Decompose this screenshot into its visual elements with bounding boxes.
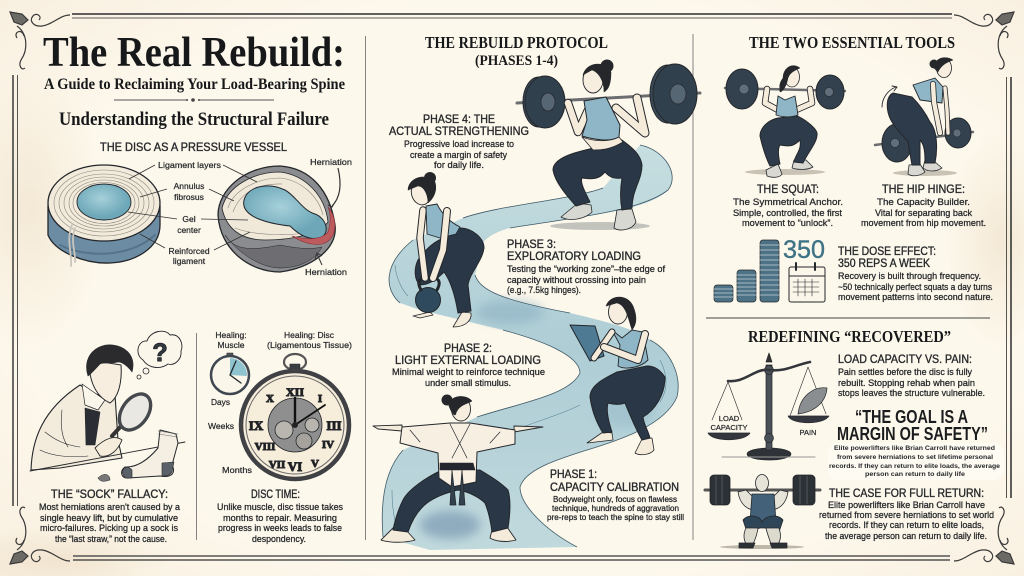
text: disc time: Unlike muscle, disc tissue takes (217, 502, 343, 513)
text: phase 1: Bodyweight only, focus on flawless (553, 494, 677, 504)
small print patch: records. If they can return to elite loads, the average (829, 463, 1000, 470)
subtitle: A Guide to Reclaiming Your Load-Bearing Spine (44, 76, 345, 93)
text: sock fallacy: single heavy lift, but by cumulative (40, 513, 178, 524)
figure: phase 2 reader squat (570, 297, 665, 455)
text: case for full return: Elite powerlifters like Brian Carroll have (828, 500, 985, 511)
ornament divider (114, 98, 274, 102)
heading: rebuild protocol (425, 33, 608, 69)
scale labels: CAPACITY (711, 423, 747, 432)
text: load capacity vs pain: Pain settles before the disc is fully (838, 367, 972, 378)
text: phase 3: Testing the “working zone”–the edge of (507, 264, 665, 275)
text: hip hinge: movement from hip movement. (861, 218, 986, 229)
pocket watch: V (311, 458, 319, 470)
text: phase 4: PHASE 4: THE (423, 112, 495, 126)
text: disc time: progress in weeks leads to false (218, 523, 342, 534)
figure: phase 3 kettlebell (408, 172, 484, 327)
text: squat: THE SQUAT: (757, 182, 819, 196)
text: squat: movement to “unlock”. (742, 218, 833, 229)
text: hip hinge (861, 182, 986, 229)
text: load capacity vs pain: LOAD CAPACITY VS. PAIN: (838, 352, 972, 366)
scale labels: LOAD (719, 414, 740, 423)
text: phase 2: PHASE 2: (444, 341, 492, 355)
small print patch (828, 443, 1004, 480)
disc labels: Ligament layers (158, 160, 221, 170)
small print patch: Elite powerlifters like Brian Carroll have returned (834, 445, 995, 452)
figure: phase 4 barbell squat (517, 60, 700, 230)
disc labels: Gel (182, 214, 196, 224)
text: dose effect: THE DOSE EFFECT: (838, 244, 936, 258)
disc labels: fibrosus (174, 192, 204, 202)
pocket watch: III (326, 418, 342, 433)
heading: rebuild protocol: THE REBUILD PROTOCOL (425, 33, 608, 52)
text: phase 2: under small stimulus. (425, 378, 511, 389)
disc labels (158, 157, 352, 277)
text: disc time (217, 487, 343, 545)
disc labels: Annulus (174, 181, 204, 191)
number: 350: 350 (783, 236, 825, 264)
heading: disc as pressure vessel: THE DISC AS A PRESSURE VESSEL (100, 140, 287, 154)
pocket watch: VII (269, 459, 285, 471)
text: disc time: months to repair. Measuring (223, 513, 337, 524)
title: The Real Rebuild: (43, 30, 345, 76)
text: sock fallacy: Most herniations aren't caused by a (39, 502, 181, 513)
leader lines and arrows (128, 165, 340, 265)
text: phase 4: for daily life. (434, 160, 484, 171)
text: phase 4: Progressive load increase to (404, 139, 514, 150)
illustration: herniated disc (218, 166, 335, 272)
clock labels: Weeks (208, 421, 234, 431)
thought bubble (137, 331, 182, 379)
text: case for full return: THE CASE FOR FULL RETURN: (829, 486, 984, 500)
text: phase 3: PHASE 3: (507, 237, 556, 251)
text: case for full return: the average person can return to daily life. (825, 531, 987, 542)
text: sock fallacy: micro-failures. Picking up a sock is (40, 523, 178, 534)
pocket watch: VIII (255, 441, 275, 453)
text: hip hinge: The Capacity Builder. (877, 197, 970, 208)
clock labels: (Ligamentous Tissue) (267, 340, 352, 350)
text: disc time: DISC TIME: (251, 487, 300, 501)
figure: powerlifter (705, 474, 820, 549)
text: phase 1: CAPACITY CALIBRATION (550, 480, 679, 494)
text: squat: Simple, controlled, the first (733, 208, 842, 219)
text: sock fallacy (39, 487, 181, 545)
text: phase 1: pre-reps to teach the spine to stay still (547, 512, 684, 522)
text: phase 4 (389, 112, 529, 171)
text: phase 2: Minimal weight to reinforce technique (392, 367, 545, 378)
text: dose effect: Recovery is built through frequency. (838, 271, 981, 282)
small print patch: person can return to daily life (865, 471, 965, 478)
illustration: man with magnifier and sock (30, 345, 185, 481)
text: dose effect: movement patterns into second nature. (838, 292, 993, 303)
pocket watch: I (318, 393, 322, 405)
pocket watch (241, 354, 349, 479)
figure: hip hinge (875, 58, 973, 176)
illustration: healthy disc (48, 165, 160, 266)
icon: coin stacks (714, 240, 779, 302)
text: dose effect (838, 244, 993, 303)
clock labels: Healing: Disc (284, 330, 335, 340)
text: phase 4: ACTUAL STRENGTHENING (389, 124, 529, 138)
text: dose effect: ~50 technically perfect squats a day turns (838, 282, 992, 293)
pocket watch: IX (249, 418, 264, 433)
disc labels: Herniation (310, 157, 352, 167)
pocket watch: XII (286, 385, 304, 399)
text: load capacity vs pain: rebuilt. Stopping rehab when pain (838, 378, 975, 389)
text: phase 3 (507, 237, 665, 296)
quote: margin of safety: “THE GOAL IS A (855, 407, 968, 427)
disc labels: center (177, 225, 201, 235)
icon: calendar (789, 263, 825, 302)
text: squat (733, 182, 843, 229)
text: disc time: despondency. (252, 534, 306, 545)
text: phase 1: PHASE 1: (550, 467, 597, 481)
text: phase 3: capacity without crossing into pain (507, 275, 646, 286)
thought bubble: ? (152, 339, 168, 367)
text: phase 3: EXPLORATORY LOADING (507, 249, 641, 263)
text: phase 2: LIGHT EXTERNAL LOADING (395, 353, 541, 367)
text: case for full return (819, 486, 994, 542)
text: load capacity vs pain: stops leaves the structure vulnerable. (838, 388, 985, 399)
figure: squat (725, 66, 845, 177)
clock labels (208, 330, 352, 475)
disc labels: ligament (173, 256, 206, 266)
pocket watch: VI (288, 459, 302, 474)
scale labels: PAIN (800, 428, 816, 437)
heading: rebuild protocol: (PHASES 1-4) (475, 53, 558, 69)
quote: margin of safety (837, 407, 988, 444)
heading: understanding the structural failure: Understanding the Structural Failure (59, 109, 329, 130)
text: hip hinge: THE HIP HINGE: (882, 182, 965, 196)
clock labels: Muscle (218, 340, 245, 350)
text: phase 1: technique, hundreds of aggravation (552, 503, 679, 513)
heading: two essential tools: THE TWO ESSENTIAL TOOLS (749, 33, 955, 52)
small muscle clock (211, 353, 249, 394)
text: case for full return: records. If they can return to elite loads, (829, 520, 984, 531)
text: phase 2 (392, 341, 545, 389)
scale labels (711, 414, 816, 437)
text: phase 3: (e.g., 7.5kg hinges). (507, 285, 581, 296)
clock labels: Months (222, 465, 252, 475)
clock labels: Healing: (215, 330, 247, 340)
figure: phase 1 gi stance (373, 394, 543, 542)
text: dose effect: 350 REPS A WEEK (838, 256, 930, 270)
text: squat: The Symmetrical Anchor. (733, 197, 843, 208)
text: hip hinge: Vital for separating back (875, 208, 972, 219)
small print patch: from severe herniations to set lifetime personal (837, 454, 993, 461)
text: phase 4: create a margin of safety (410, 150, 507, 161)
text: phase 1 (547, 467, 684, 522)
text: case for full return: returned from severe herniations to set world (819, 510, 994, 521)
illustration: balance scale (708, 353, 829, 460)
clock labels: Days (211, 397, 230, 407)
watercolor path ribbon (382, 145, 678, 550)
quote: margin of safety: MARGIN OF SAFETY” (837, 424, 988, 444)
disc labels: Herniation (305, 267, 347, 277)
text: load capacity vs pain (838, 352, 985, 399)
text: sock fallacy: the “last straw,” not the cause. (55, 534, 167, 545)
pocket watch: IV (322, 439, 334, 451)
disc labels: Reinforced (168, 246, 210, 256)
heading: redefining recovered: REDEFINING “RECOVERED” (748, 327, 951, 346)
pocket watch: X (266, 393, 274, 405)
text: sock fallacy: THE “SOCK” FALLACY: (51, 487, 168, 501)
